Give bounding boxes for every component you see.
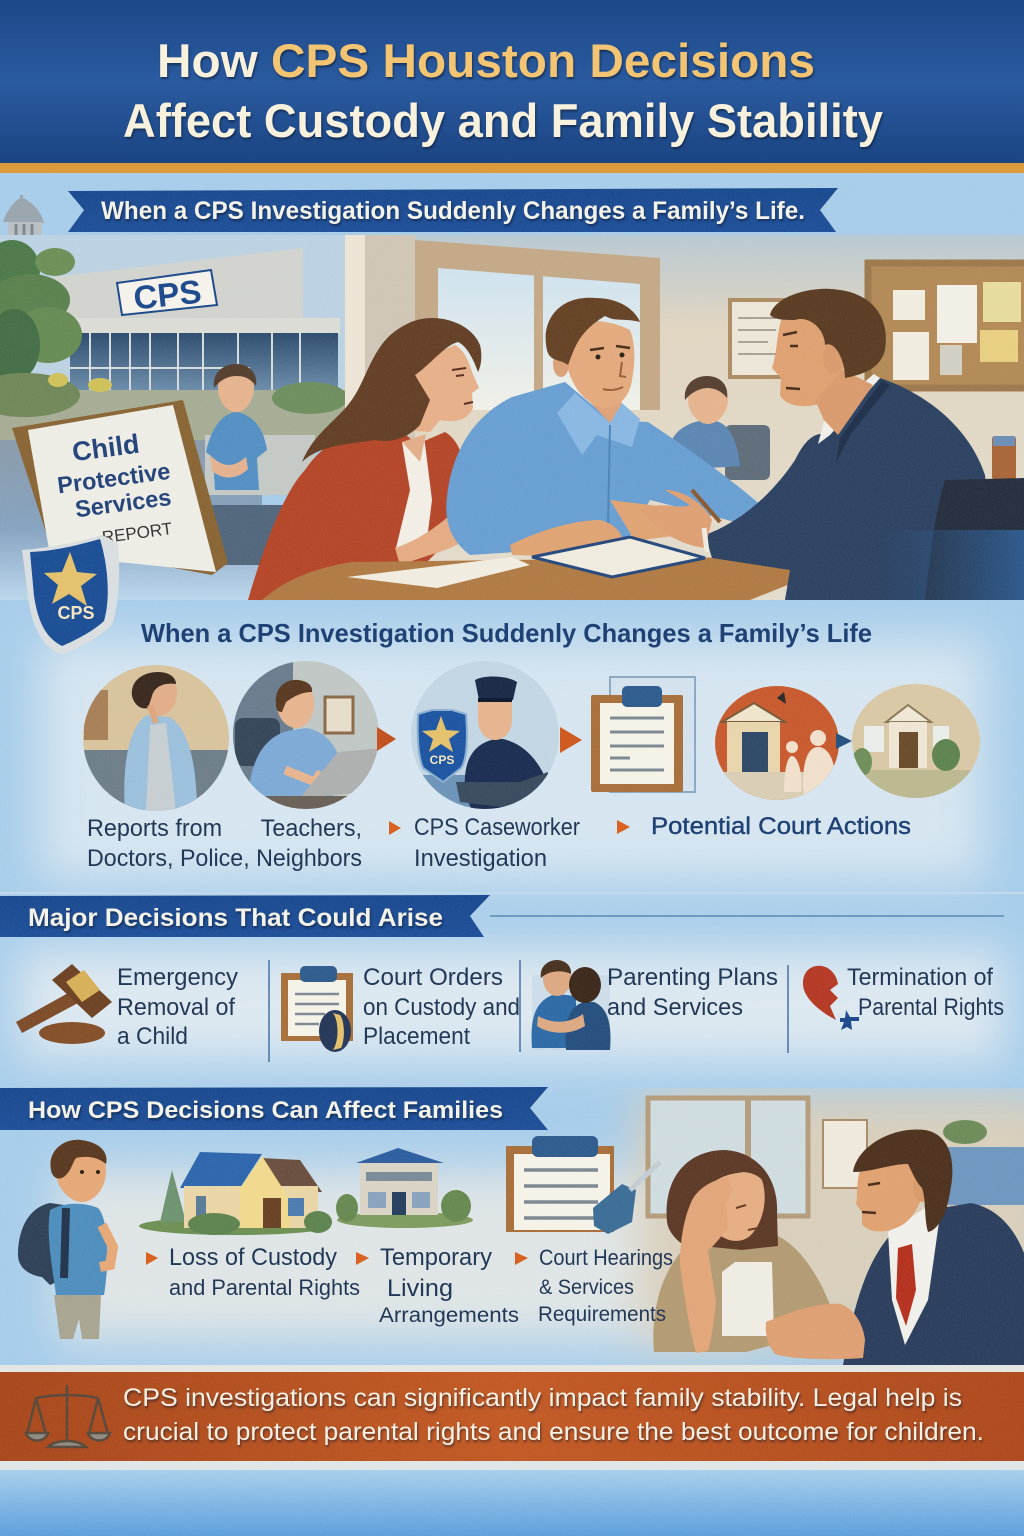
title: Affect Custody and Family Stability	[123, 94, 883, 147]
text: court orders: Court Orders	[363, 964, 503, 991]
label: reports	[87, 815, 362, 872]
arrow	[836, 733, 852, 749]
icon: courthouse	[852, 684, 980, 798]
table with papers	[262, 537, 845, 600]
text: emergency removal	[117, 964, 238, 1050]
icon: police officer with CPS badge	[411, 661, 559, 815]
sign: child protective services report	[12, 400, 228, 575]
label: temporary living: Arrangements	[379, 1304, 519, 1327]
label: court hearings: Requirements	[538, 1303, 666, 1326]
header band	[0, 0, 1024, 173]
office chair	[925, 478, 1024, 600]
sign: child protective services report: REPORT	[101, 519, 173, 547]
panel: conclusion band	[0, 1365, 1024, 1536]
icon: man at laptop	[233, 660, 384, 810]
icon: clipboard with pen	[506, 1136, 660, 1234]
corkboard	[868, 263, 1024, 388]
label: loss of custody: and Parental Rights	[169, 1275, 360, 1300]
icon: CPS shield badge: CPS	[57, 603, 95, 623]
ribbon: major decisions	[0, 895, 1004, 937]
label: loss of custody	[146, 1244, 360, 1300]
panel: decisions	[16, 960, 1004, 1062]
title: How CPS Houston Decisions	[157, 34, 815, 87]
left lower ground	[0, 440, 262, 600]
text: conclusion: crucial to protect parental rights and ensure the best outcome for children.	[123, 1418, 984, 1446]
label: court hearings: & Services	[539, 1276, 634, 1299]
sign: child protective services report: Services	[73, 484, 173, 522]
ribbon: family effects	[0, 1087, 548, 1130]
ribbon: family effects: How CPS Decisions Can Affect Families	[28, 1097, 503, 1124]
text: parenting plans: and Services	[607, 994, 743, 1021]
window	[415, 240, 660, 410]
arrow	[377, 727, 396, 751]
woman	[248, 318, 487, 600]
ribbon: major decisions: Major Decisions That Could Arise	[28, 904, 443, 932]
text: court orders: Placement	[363, 1023, 470, 1050]
room background	[415, 235, 1024, 600]
label: caseworker	[389, 814, 580, 872]
text: court orders	[363, 964, 520, 1050]
ribbon: section banner: When a CPS Investigation Suddenly Changes a Family’s Life.	[101, 197, 805, 225]
icon: scales of justice	[26, 1385, 110, 1447]
heading: process: When a CPS Investigation Suddenly Changes a Family’s Life	[141, 618, 872, 648]
bottle	[992, 436, 1016, 480]
child: left	[206, 364, 267, 490]
sign: child protective services report: Protective	[56, 458, 172, 498]
icon: clipboard	[591, 677, 695, 792]
text: emergency removal: Emergency	[117, 964, 238, 991]
ribbon: section banner	[68, 188, 838, 232]
label: temporary living: Living	[387, 1275, 453, 1302]
text: conclusion: CPS investigations can significantly impact family stability. Legal help is	[123, 1384, 962, 1412]
outdoor building	[0, 235, 415, 460]
framed document	[730, 300, 785, 377]
text: court orders: on Custody and	[363, 994, 520, 1021]
icon: parent hugging child	[532, 960, 610, 1050]
label: court hearings: Court Hearings	[539, 1245, 673, 1270]
label: caseworker: CPS Caseworker	[414, 814, 580, 841]
text: parenting plans	[607, 964, 778, 1021]
illustration: temporary residence	[336, 1148, 473, 1228]
text: parenting plans: Parenting Plans	[607, 964, 778, 991]
label: temporary living	[356, 1244, 519, 1327]
text: termination: Termination of	[847, 964, 993, 991]
label: court hearings	[515, 1245, 673, 1326]
text: termination	[847, 964, 1004, 1021]
right corner fade	[910, 530, 1024, 600]
icon: court order clipboard	[281, 966, 353, 1052]
label: loss of custody: Loss of Custody	[169, 1244, 337, 1271]
child: right	[672, 376, 770, 480]
effect labels	[146, 1244, 673, 1327]
icon: broken heart	[803, 966, 859, 1030]
illustration: office background	[648, 1098, 1024, 1216]
icon: gavel	[16, 964, 112, 1044]
label: temporary living: Temporary	[380, 1244, 492, 1271]
illustration: office scene	[0, 235, 1024, 600]
icon: CPS shield badge	[22, 535, 119, 655]
icon: police officer with CPS badge: CPS	[430, 753, 454, 767]
text: emergency removal: a Child	[117, 1023, 188, 1050]
title	[123, 34, 883, 147]
arrow	[560, 727, 582, 753]
label: reports: Doctors, Police, Neighbors	[87, 845, 362, 872]
process labels	[87, 813, 911, 872]
illustration: family house	[139, 1152, 332, 1235]
illustration: domed building	[3, 195, 44, 252]
label: caseworker: Investigation	[414, 845, 547, 872]
text: termination: Parental Rights	[858, 994, 1004, 1021]
outdoor building: CPS	[132, 273, 203, 316]
icon: house and family	[715, 685, 840, 805]
illustration: boy with backpack	[18, 1140, 113, 1339]
lawyer	[640, 289, 1024, 600]
text: emergency removal: Removal of	[117, 994, 235, 1021]
man in blue shirt	[446, 298, 769, 556]
label: court actions: Potential Court Actions	[651, 813, 911, 840]
icon: woman on phone	[82, 664, 230, 813]
illustration: attorney	[766, 1129, 1024, 1365]
text: conclusion	[123, 1384, 984, 1446]
label: reports: Reports from Teachers,	[87, 815, 362, 842]
illustration: worried mother	[653, 1150, 836, 1353]
panel: family effects background	[640, 1095, 1024, 1340]
sign: child protective services report: Child	[70, 429, 141, 467]
